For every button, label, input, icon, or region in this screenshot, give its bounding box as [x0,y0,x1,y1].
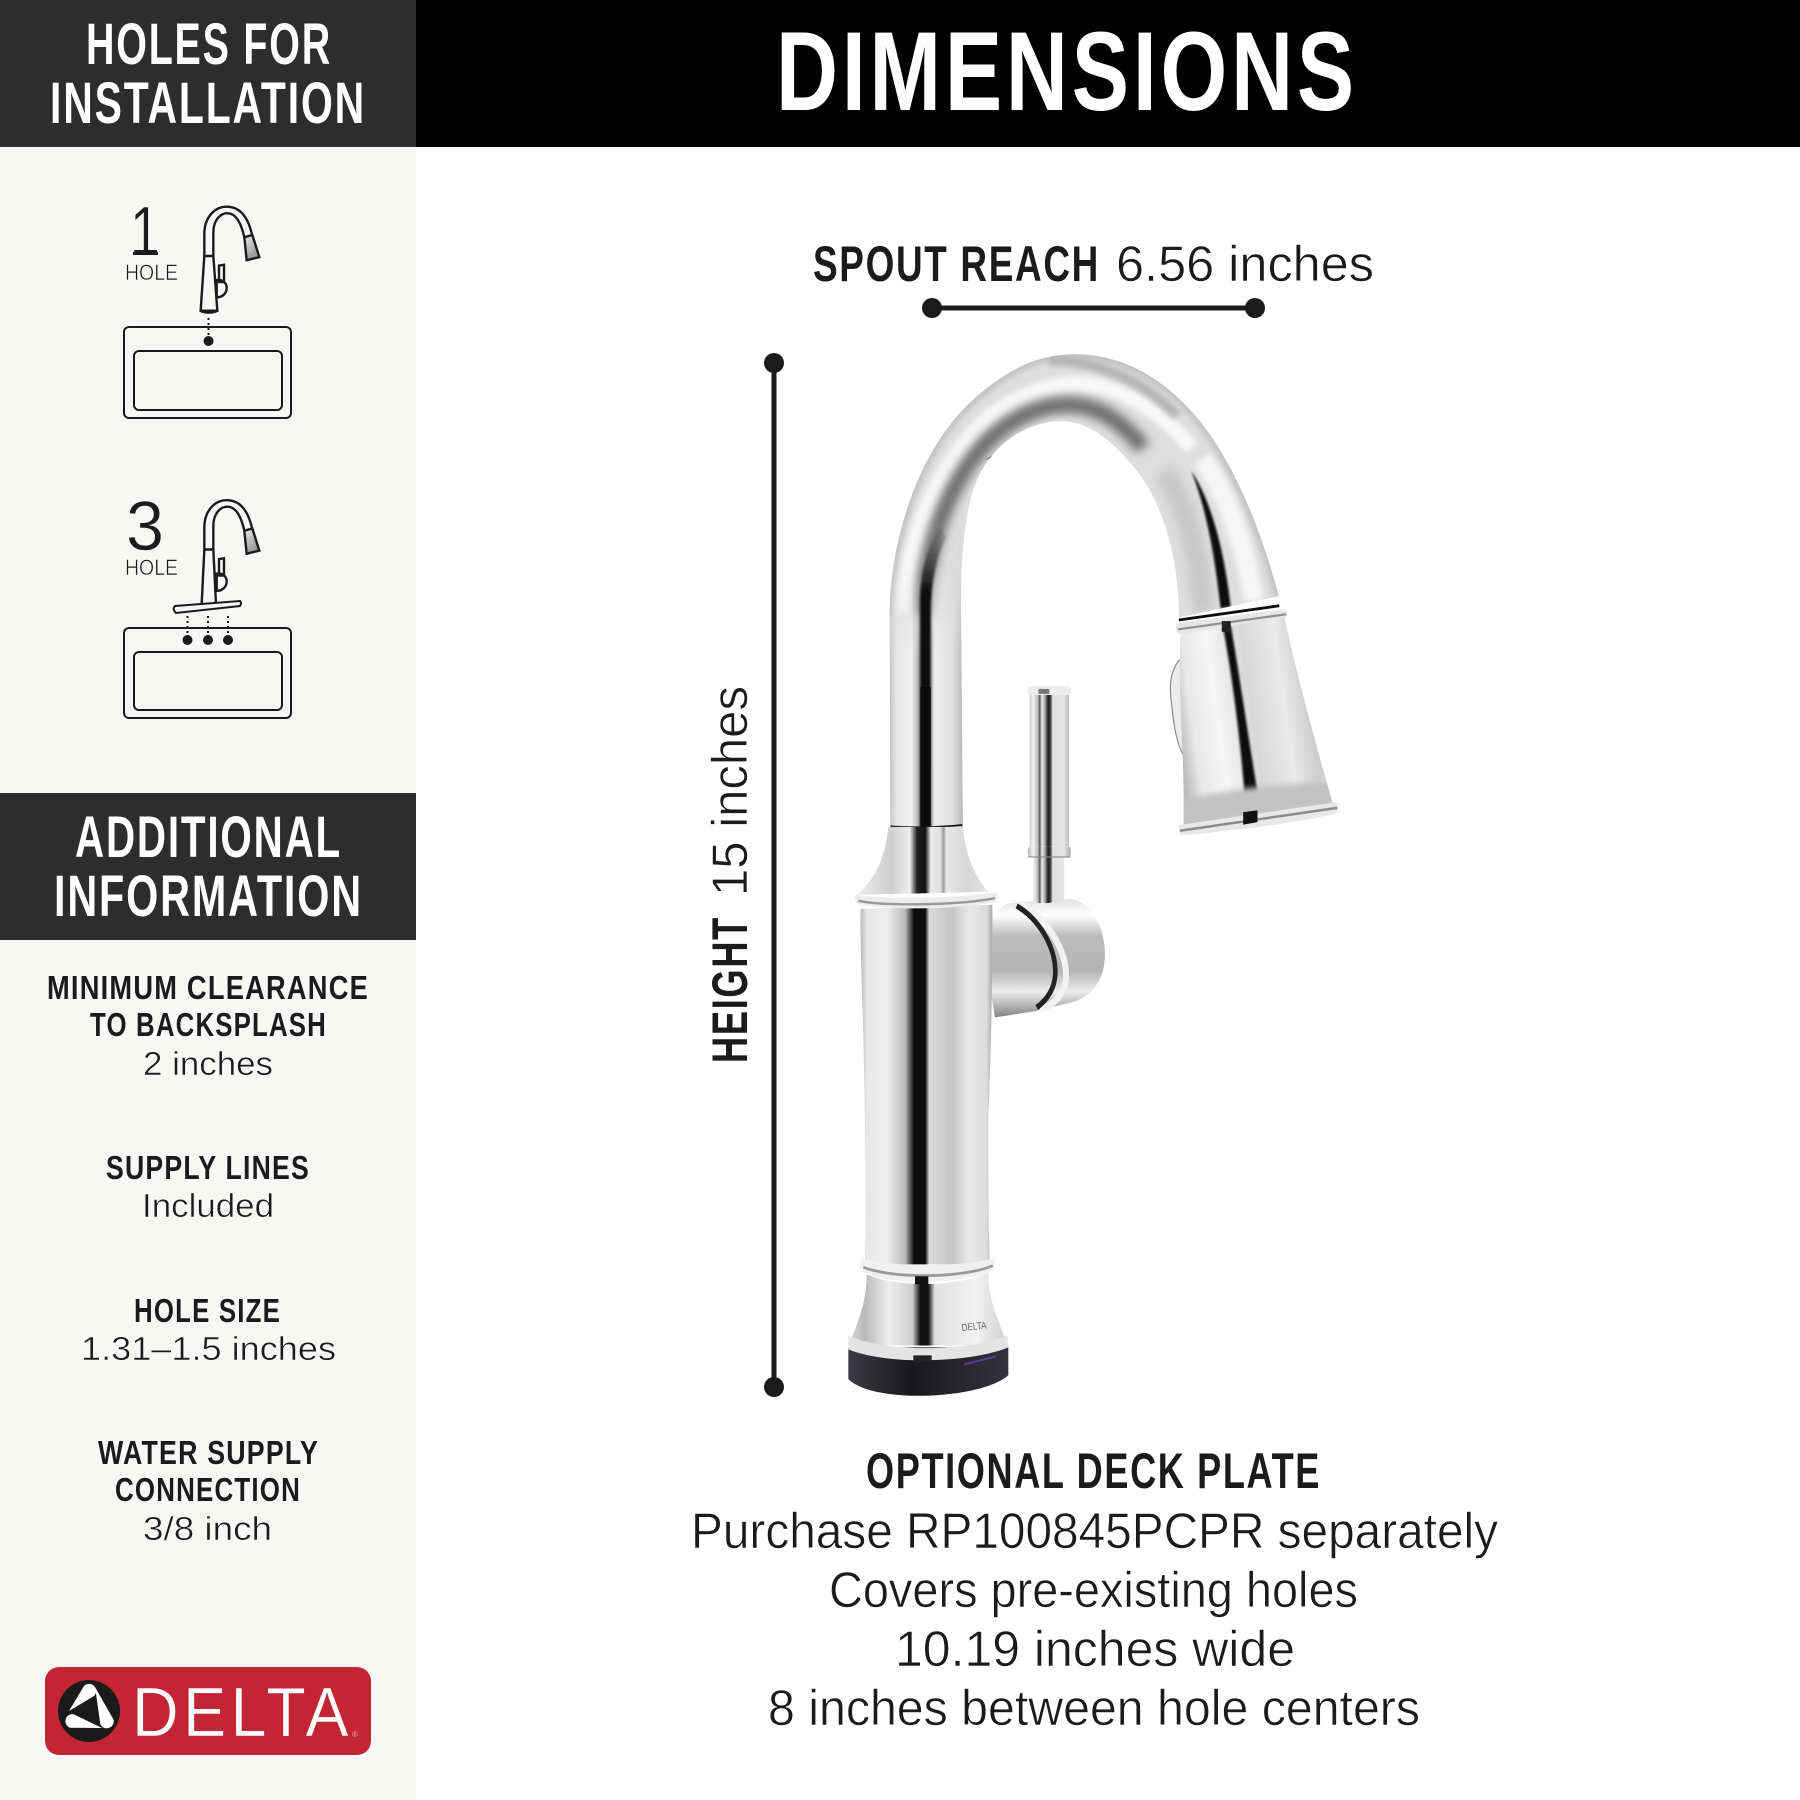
heading: additional information: INFORMATION [54,864,363,929]
arrow: height dimension line [764,353,784,1397]
faucet: body and base [848,827,1105,1396]
text block: water supply connection: WATER SUPPLY [98,1434,319,1471]
label: height: HEIGHT [702,916,758,1063]
heading: holes for installation: INSTALLATION [50,71,366,136]
text block: water supply connection [98,1434,319,1547]
icon: 3 hole installation [124,487,291,718]
text block: water supply connection: CONNECTION [115,1471,301,1508]
text block: minimum clearance: TO BACKSPLASH [90,1006,327,1043]
faucet image [848,354,1338,1396]
faucet: handle lever [1028,686,1071,903]
heading: additional information: ADDITIONAL [75,805,342,870]
text block: minimum clearance: MINIMUM CLEARANCE [47,969,369,1006]
faucet: engraved brand: DELTA [961,1320,987,1334]
faucet: spout and head [888,354,1338,836]
heading: holes for installation: HOLES FOR [86,12,332,77]
text block: optional deck plate: Purchase RP100845PCPR separately [691,1503,1498,1559]
icon: 3 hole installation: HOLE [125,555,178,580]
title bar: dimensions [416,0,1800,147]
logo: Delta: ® [352,1730,358,1739]
text block: optional deck plate: 10.19 inches wide [895,1621,1295,1677]
text block: supply lines: SUPPLY LINES [106,1149,310,1186]
arrow: spout reach dimension line [922,298,1265,318]
text block: minimum clearance [47,969,369,1082]
label: height [702,686,758,1063]
logo: Delta: DELTA [132,1673,353,1751]
text block: minimum clearance: 2 inches [143,1045,273,1082]
heading: additional information [0,793,416,940]
icon: 1 hole installation [124,192,291,418]
text block: optional deck plate: 8 inches between hole centers [768,1680,1420,1736]
heading: holes for installation [0,0,416,147]
label: spout reach: SPOUT REACH [813,236,1100,292]
text block: supply lines: Included [142,1187,274,1224]
label: spout reach [813,236,1374,292]
icon: 1 hole installation: 1 [130,192,160,270]
text block: supply lines [106,1149,310,1224]
label: height: 15 inches [702,686,758,896]
title bar: dimensions: DIMENSIONS [776,9,1358,134]
text block: water supply connection: 3/8 inch [143,1510,272,1547]
text block: optional deck plate [691,1443,1498,1736]
panel: sidebar [0,0,416,1800]
text block: hole size: HOLE SIZE [134,1292,281,1329]
text block: hole size: 1.31–1.5 inches [81,1330,336,1367]
label: spout reach: 6.56 inches [1116,236,1374,292]
icon: 1 hole installation: HOLE [125,260,178,285]
text block: hole size [81,1292,336,1367]
logo: Delta [45,1667,371,1755]
text block: optional deck plate: OPTIONAL DECK PLATE [866,1443,1321,1499]
icon: 3 hole installation: 3 [126,487,164,565]
text block: optional deck plate: Covers pre-existing holes [829,1562,1358,1618]
